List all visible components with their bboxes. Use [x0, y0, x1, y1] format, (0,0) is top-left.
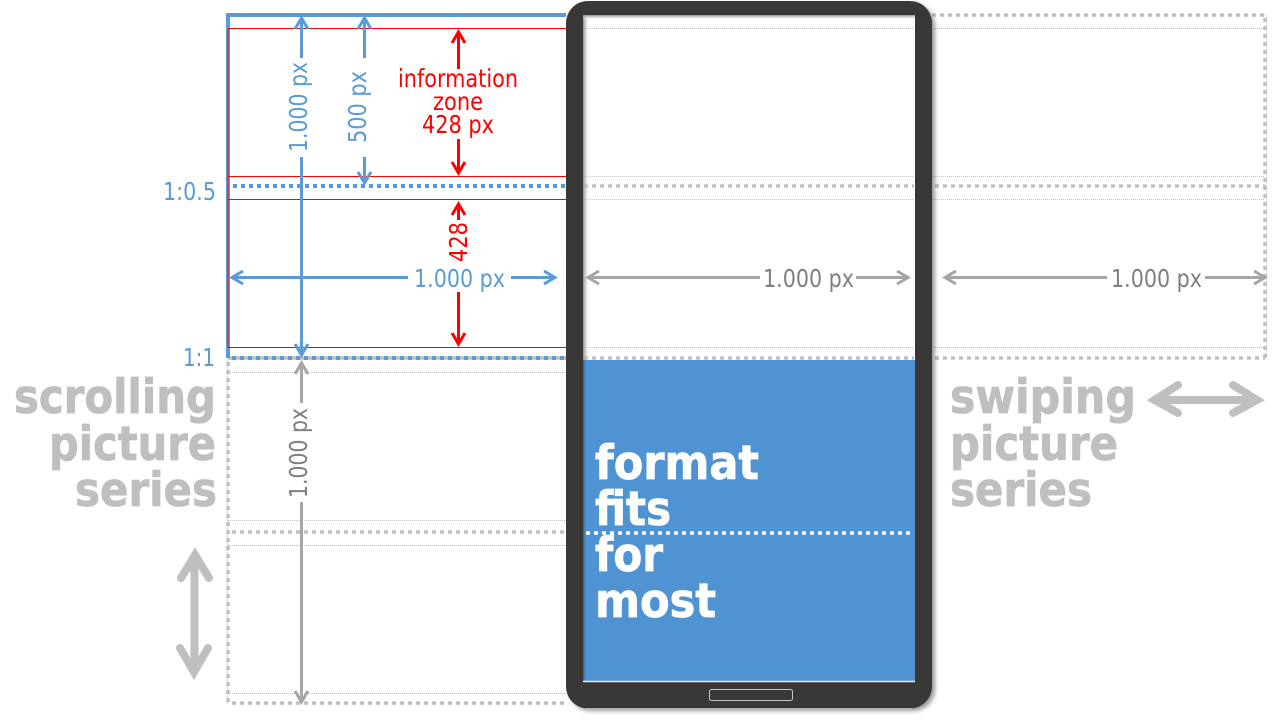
title: swiping picture series: picture	[950, 417, 1118, 472]
label: 1.000 px grey vertical: 1.000 px	[284, 408, 313, 498]
screen inner shadow	[583, 15, 915, 360]
label: 1:1: 1:1	[183, 343, 215, 372]
phone shadow	[569, 4, 935, 711]
text: format fits for most: format	[595, 436, 759, 491]
label: 428 vertical: 428	[444, 222, 473, 262]
arrow: information zone up	[452, 32, 465, 69]
arrow: 1.000 px blue vertical	[295, 18, 308, 355]
title: scrolling picture series: scrolling	[14, 370, 216, 425]
home button	[710, 690, 792, 700]
text: format fits for most: fits	[595, 482, 671, 537]
text: information zone: zone	[433, 87, 483, 116]
text: information zone: 428 px	[422, 110, 494, 139]
text: format fits for most: for	[595, 528, 664, 583]
label: 1.000 px second panel: 1.000 px	[1111, 264, 1202, 293]
title: swiping picture series: swiping	[950, 370, 1136, 425]
arrow: information zone down	[452, 139, 465, 173]
label: 1.000 px vertical: 1.000 px	[284, 62, 313, 152]
arrow: 1.000 px blue horizontal	[232, 271, 555, 284]
arrow: 1.000 px grey swipe second panel	[945, 271, 1265, 284]
text: format fits for most: most	[595, 574, 716, 629]
title: swiping picture series: series	[950, 463, 1092, 518]
phone bottom edge highlight	[586, 708, 912, 710]
dotted grey lines on screen	[584, 28, 914, 358]
thin dotted guide lines	[228, 15, 1266, 703]
1:0.5 dotted line	[233, 184, 566, 188]
icon: vertical double arrow	[180, 555, 209, 672]
dotted grey frame	[228, 15, 1265, 703]
panel: 1:1 blue frame with information zones	[228, 15, 566, 358]
arrow: 500 px blue vertical	[358, 18, 371, 183]
blue format panel	[583, 360, 915, 681]
label: 1:0.5: 1:0.5	[163, 177, 216, 206]
arrow: 428 down	[452, 292, 465, 344]
title: scrolling picture series: series	[75, 463, 217, 518]
panel: smartphone	[566, 1, 935, 711]
arrow: 1.000 px grey vertical	[295, 363, 308, 702]
screen edge highlight	[583, 680, 915, 682]
text: information zone	[398, 64, 518, 139]
text: information zone: information	[398, 64, 518, 93]
red information zone lines	[228, 28, 566, 348]
label: 1.000 px blue horizontal: 1.000 px	[414, 264, 505, 293]
blue panel edge shade	[583, 360, 587, 681]
blue frame	[228, 15, 566, 358]
arrow: 428 up	[452, 204, 465, 220]
panel: picture series grid	[228, 15, 1266, 703]
label: 500 px vertical: 500 px	[343, 71, 372, 143]
arrow: 1.000 px grey on screen	[588, 271, 908, 284]
icon: horizontal double arrow	[1154, 385, 1257, 413]
1:1 dotted line	[232, 356, 566, 360]
title: scrolling picture series: picture	[49, 417, 216, 472]
title: scrolling picture series	[14, 370, 217, 518]
phone body	[566, 1, 932, 708]
label: 1.000 px on screen: 1.000 px	[763, 264, 854, 293]
phone screen	[583, 15, 915, 681]
text: format fits for most	[595, 436, 759, 629]
title: swiping picture series	[950, 370, 1136, 518]
dotted white line	[586, 531, 912, 535]
